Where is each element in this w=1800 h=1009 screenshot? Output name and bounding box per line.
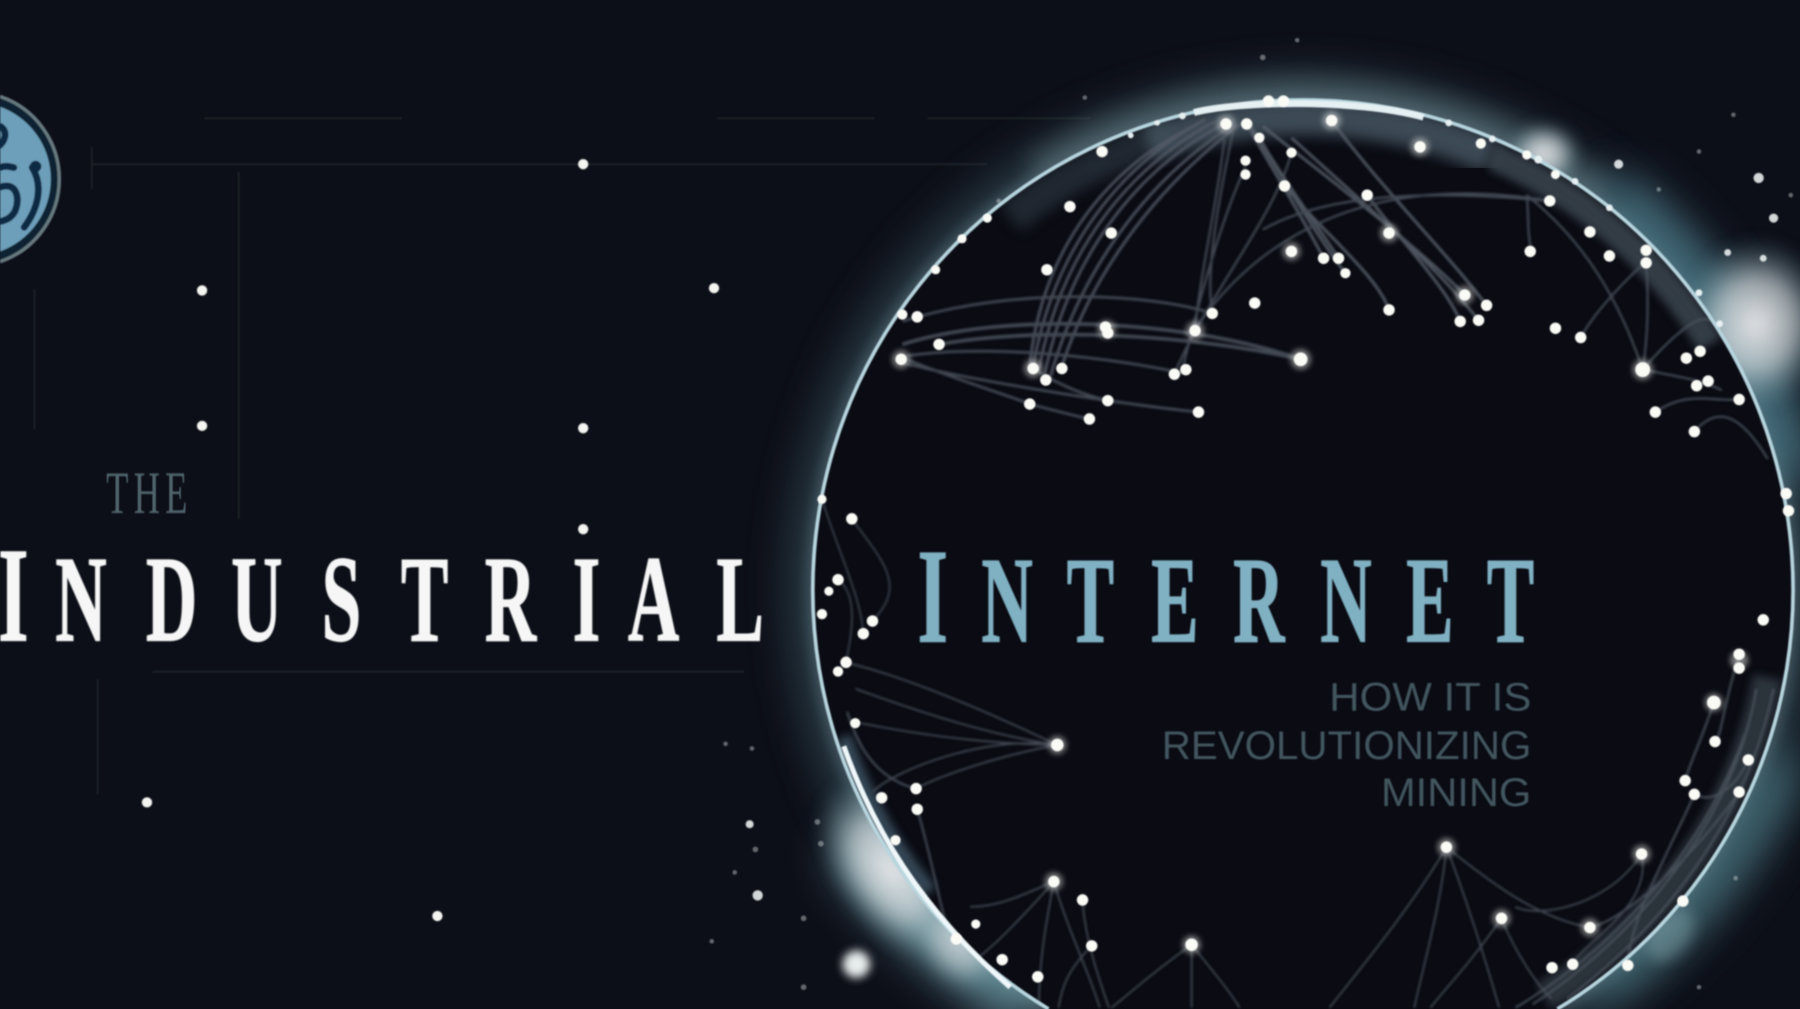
globe inner network lines bbox=[822, 119, 1786, 1008]
globe interior disc bbox=[813, 100, 1793, 1009]
logo badge bbox=[0, 96, 59, 262]
title: INDUSTRIAL: NDUSTRIAL bbox=[55, 532, 764, 667]
subtitle: REVOLUTIONIZING bbox=[1162, 723, 1531, 768]
title: THE: THE bbox=[106, 459, 187, 526]
globe interior haze along the rim bbox=[844, 117, 1768, 996]
globe rim bbox=[813, 100, 1793, 1009]
subtitle: MINING bbox=[1381, 770, 1531, 815]
subtitle: HOW IT IS bbox=[1329, 675, 1531, 720]
title: INTERNET: NTERNET bbox=[981, 533, 1534, 669]
subtitle bbox=[1162, 675, 1531, 815]
stars outside the globe bbox=[709, 38, 1793, 990]
scattered nodes on the left bbox=[142, 159, 719, 921]
globe outer glow bbox=[785, 90, 1800, 1009]
title: INTERNET: I bbox=[917, 521, 948, 671]
background circuit lines bbox=[34, 118, 1091, 794]
network nodes bbox=[817, 95, 1794, 983]
